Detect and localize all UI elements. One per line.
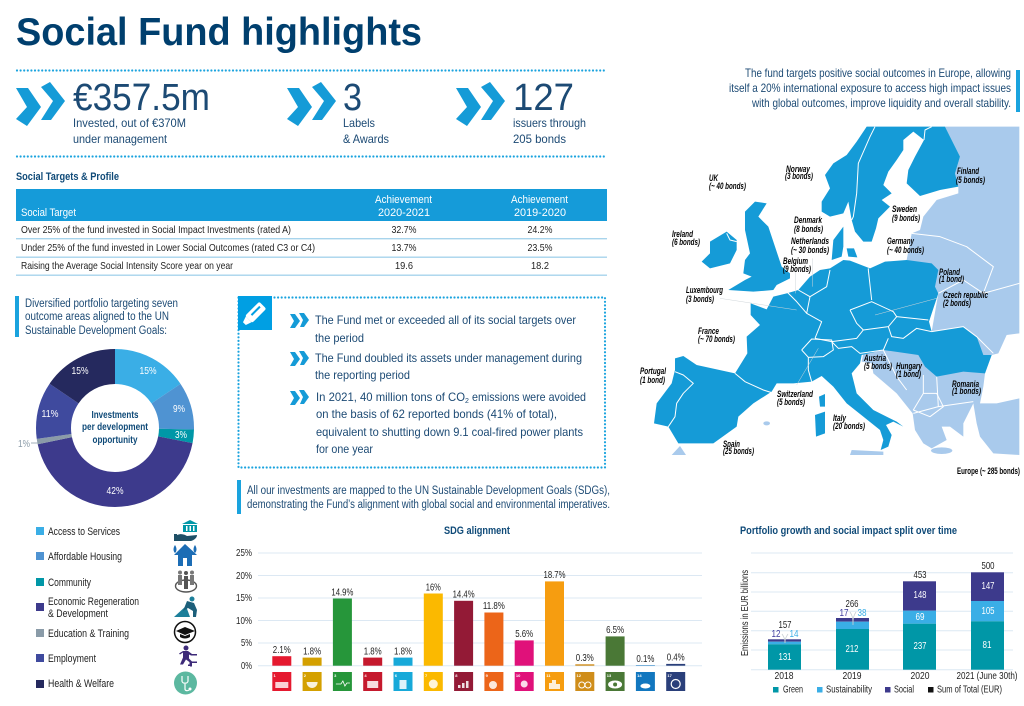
- table rows: 13.7%: [392, 242, 416, 254]
- legend: outcome areas: Education & Training: [48, 628, 129, 640]
- donut chart: [18, 365, 187, 497]
- bar: 2021: 105: [982, 605, 995, 617]
- map labels: (25 bonds): [723, 446, 754, 456]
- invested land: [654, 127, 992, 450]
- map labels: Finland: [957, 166, 979, 176]
- key figure: issuers: [456, 77, 586, 146]
- bullet 2: the reporting period: [315, 368, 410, 382]
- bar: 2020: 69: [916, 611, 925, 623]
- chart legend: [773, 684, 1002, 696]
- icon: highlighter: [238, 296, 272, 330]
- bar values: 1.8%: [364, 646, 382, 658]
- bar values: 18.7%: [544, 569, 566, 581]
- legend: outcome areas: Affordable Housing: [48, 551, 122, 563]
- bar chart: SDG alignment: 20%: [236, 570, 252, 582]
- icon: access to services: [174, 520, 198, 541]
- bar: 2018: [768, 619, 801, 670]
- donut chart: 1%: [18, 438, 30, 450]
- x axis labels: 2018: [774, 670, 794, 682]
- donut centre label: Investments: [92, 409, 139, 421]
- key figure: invested: €357.5m: [73, 77, 210, 119]
- map labels: (1 bond): [939, 274, 964, 284]
- bar: 2021: [971, 560, 1004, 670]
- donut chart: 15%: [72, 365, 88, 377]
- bar: 2020: 237: [914, 640, 927, 652]
- key figure: invested: under management: [73, 132, 168, 146]
- bullet 3: on the basis of 62 reported bonds (41% of total),: [316, 407, 557, 421]
- map of Europe: [640, 127, 1020, 476]
- legend: outcome areas: Economic Regeneration: [48, 596, 139, 608]
- SDG goal tiles: 11: [546, 673, 551, 678]
- donut chart: 42%: [106, 485, 124, 497]
- bullet 1: [290, 313, 576, 345]
- bar values: 1.8%: [303, 646, 321, 658]
- map labels: (1 bonds): [952, 386, 981, 396]
- panel: social targets table: [16, 171, 607, 276]
- map labels: Hungary: [896, 361, 923, 371]
- table rows: 19.6: [395, 260, 413, 272]
- bar values: 11.8%: [483, 600, 505, 612]
- bar values: 2.1%: [273, 644, 291, 656]
- map labels: (9 bonds): [892, 213, 920, 223]
- bar: 2021: 81: [982, 639, 992, 651]
- bar values: 14.4%: [453, 588, 475, 600]
- map labels: Norway: [786, 164, 811, 174]
- key figure: invested: [16, 77, 210, 146]
- map labels: Czech republic: [943, 290, 988, 300]
- icon: education: [174, 622, 196, 642]
- SDG goal tiles: 2: [304, 673, 307, 678]
- map labels: (8 bonds): [794, 224, 823, 234]
- map labels: Germany: [887, 236, 915, 246]
- chart legend: Sustainability: [826, 684, 872, 696]
- table rows: Over 25% of the fund invested in Social Impact Investments (rated A): [21, 224, 291, 236]
- legend: outcome areas: Employment: [48, 653, 96, 665]
- table heading: Social Targets & Profile: [16, 171, 119, 183]
- key figure: labels and awards: Labels: [343, 116, 375, 130]
- bar: 2021: 500: [982, 560, 995, 572]
- table header: Achievement: [511, 194, 568, 206]
- map labels: Poland: [939, 267, 960, 277]
- table rows: 24.2%: [528, 224, 552, 236]
- bullet 1: The Fund met or exceeded all of its social targets over: [315, 313, 576, 327]
- bar: 2018: 12: [772, 628, 781, 640]
- map labels: Ireland: [672, 229, 693, 239]
- x axis labels: 2020: [910, 670, 930, 682]
- bar values: 14.9%: [331, 586, 353, 598]
- bullet 3: In 2021, 40 million tons of CO: [316, 390, 465, 404]
- chart title: SDG alignment: [444, 525, 510, 537]
- icon: economic development worker: [174, 596, 197, 617]
- legend: outcome areas: Health & Welfare: [48, 678, 114, 690]
- table header: Achievement: [375, 194, 432, 206]
- map labels: [640, 164, 988, 456]
- map labels: Luxembourg: [686, 285, 723, 295]
- y axis label: Emissions in EUR billions: [740, 570, 751, 656]
- SDG goal tiles: 10: [516, 673, 521, 678]
- map labels: (5 bonds): [864, 361, 892, 371]
- map labels: (5 bonds): [956, 175, 985, 185]
- bar: 2018: 14: [790, 628, 799, 640]
- bar values: 0.4%: [667, 652, 685, 664]
- SDG goal tiles: 7: [425, 673, 428, 678]
- map labels: (5 bonds): [777, 397, 805, 407]
- map labels: (~ 40 bonds): [709, 181, 746, 191]
- donut centre label: opportunity: [92, 434, 138, 446]
- donut centre label: [82, 409, 148, 446]
- map labels: Sweden: [892, 204, 917, 214]
- table rows: Raising the Average Social Intensity Score year on year: [21, 260, 233, 272]
- map labels: (~ 30 bonds): [791, 245, 829, 255]
- map labels: France: [698, 326, 719, 336]
- SDG goal tiles: 17: [667, 673, 673, 678]
- donut chart: 9%: [173, 403, 185, 415]
- map labels: (20 bonds): [833, 421, 865, 431]
- bar: 2019: 17: [840, 607, 849, 619]
- SDG goal tiles: 3: [334, 673, 337, 678]
- country borders: [668, 127, 1019, 427]
- bar: 2019: 212: [846, 643, 859, 655]
- stacked bar chart: portfolio growth: [740, 525, 1018, 696]
- map labels: (~ 40 bonds): [887, 245, 924, 255]
- map labels: (9 bonds): [783, 264, 811, 274]
- text block: diversified portfolio: Sustainable Development Goals:: [25, 325, 167, 337]
- key figure: labels and awards: 3: [343, 77, 362, 119]
- text block: diversified portfolio: [15, 296, 178, 337]
- key figure: invested: Invested, out of €370M: [73, 116, 186, 130]
- icon: health: [174, 672, 197, 694]
- bar: 2019: 38: [858, 607, 867, 619]
- map labels: (1 bond): [640, 375, 665, 385]
- legend: outcome areas: [36, 526, 139, 690]
- map labels: Italy: [833, 413, 847, 423]
- map labels: Portugal: [640, 366, 666, 376]
- bar values: 0.3%: [576, 652, 594, 664]
- bar: 2018: 157: [778, 619, 792, 631]
- bar: 2020: 453: [914, 569, 927, 581]
- map labels: Belgium: [783, 256, 808, 266]
- panel: fund summary callout: [238, 296, 605, 468]
- text block: SDG mapping: [237, 480, 610, 514]
- map labels: (3 bonds): [686, 294, 714, 304]
- bullet 3: [290, 390, 586, 456]
- bar: 2019: [836, 598, 869, 670]
- SDG goal tiles: 1: [274, 673, 276, 678]
- intro text: fund targets: [729, 66, 1020, 112]
- chart legend: Social: [894, 684, 914, 696]
- map labels: Austria: [863, 353, 886, 363]
- key figure: issuers: 205 bonds: [513, 132, 566, 146]
- key figure: issuers: issuers through: [513, 116, 586, 130]
- bar values: 6.5%: [606, 624, 624, 636]
- map labels: Spain: [723, 439, 740, 449]
- text block: SDG mapping: All our investments are mapped to the UN Sustainable Development Goals (SDGs),: [247, 485, 610, 497]
- map labels: (1 bond): [896, 369, 921, 379]
- SDG goal tiles: 8: [455, 673, 458, 678]
- chart legend: Green: [783, 684, 803, 696]
- icon: employment: [179, 646, 197, 666]
- text block: SDG mapping: demonstrating the Fund’s alignment with global social and environmental imperatives.: [247, 499, 610, 511]
- bar: 2019: 266: [846, 598, 859, 610]
- table rows: [16, 224, 607, 276]
- donut centre label: per development: [82, 421, 148, 433]
- bullet 3: equivalent to shutting down 9.1 coal-fired power plants: [316, 425, 583, 439]
- bar chart: SDG alignment: [236, 525, 702, 691]
- bar chart: SDG alignment: 10%: [236, 615, 252, 627]
- key figures band: [16, 70, 607, 156]
- table header: Social Target: [21, 207, 76, 219]
- bar chart: SDG alignment: 15%: [236, 592, 252, 604]
- table rows: 18.2: [531, 260, 549, 272]
- key figure: labels and awards: [287, 77, 389, 146]
- bullet 2: The Fund doubled its assets under management during: [315, 351, 582, 365]
- table header: 2019-2020: [514, 207, 566, 219]
- map labels: (~ 70 bonds): [698, 334, 735, 344]
- SDG goal tiles: 6: [395, 673, 398, 678]
- map labels: Netherlands: [791, 236, 829, 246]
- icon: community: [176, 570, 196, 592]
- donut chart: 15%: [140, 365, 156, 377]
- bullet 1: the period: [315, 331, 364, 345]
- table header: [16, 189, 607, 221]
- SDG goal tiles: 13: [607, 673, 612, 678]
- bar values: 5.6%: [515, 628, 533, 640]
- bullet 3: for one year: [316, 442, 373, 456]
- map labels: Denmark: [794, 215, 823, 225]
- map labels: Switzerland: [777, 389, 813, 399]
- bar chart: SDG alignment: 25%: [236, 547, 252, 559]
- non-invested land: [672, 127, 1019, 455]
- bar chart: SDG alignment: 5%: [241, 637, 252, 649]
- table rows: Under 25% of the fund invested in Lower Social Outcomes (rated C3 or C4): [21, 242, 315, 254]
- table rows: 23.5%: [528, 242, 552, 254]
- bars: [272, 581, 685, 666]
- bar values: 1.8%: [394, 646, 412, 658]
- SDG goal tiles: 9: [486, 673, 489, 678]
- chart title: Portfolio growth and social impact split over time: [740, 525, 957, 537]
- x axis labels: 2019: [842, 670, 862, 682]
- bar: 2020: 148: [914, 589, 927, 601]
- legend: outcome areas: Community: [48, 577, 91, 589]
- SDG goal tiles: 14: [637, 673, 642, 678]
- legend: outcome areas: Access to Services: [48, 526, 120, 538]
- bar values: 0.1%: [636, 653, 654, 665]
- SDG goal tiles: 12: [576, 673, 582, 678]
- bar: 2020: [903, 569, 936, 670]
- map labels: UK: [709, 173, 719, 183]
- table header: 2020-2021: [378, 207, 430, 219]
- table rows: 32.7%: [392, 224, 416, 236]
- map labels: Romania: [952, 379, 979, 389]
- icon: affordable housing: [174, 544, 197, 566]
- map labels: (3 bonds): [785, 171, 813, 181]
- bar chart: SDG alignment: 0%: [241, 660, 252, 672]
- bullet 3: 2: [465, 398, 469, 405]
- donut chart: 3%: [175, 429, 187, 441]
- chart legend: Sum of Total (EUR): [937, 684, 1002, 696]
- text block: diversified portfolio: Diversified portfolio targeting seven: [25, 298, 178, 310]
- donut chart: 11%: [42, 408, 58, 420]
- bar values: 16%: [426, 582, 441, 594]
- bullet 2: [290, 351, 582, 382]
- bar: 2021: 147: [982, 580, 995, 592]
- leader lines: [720, 258, 937, 385]
- bullet 3: emissions were avoided: [472, 390, 586, 404]
- SDG goal tiles: [272, 672, 685, 691]
- key figure: issuers: 127: [513, 77, 574, 119]
- bar values: [273, 569, 685, 665]
- SDG goal tiles: 4: [364, 673, 367, 678]
- legend: outcome areas: & Development: [48, 608, 108, 620]
- x axis labels: [774, 670, 1018, 682]
- text block: diversified portfolio: outcome areas aligned to the UN: [25, 311, 169, 323]
- map labels: (6 bonds): [672, 237, 700, 247]
- key figure: labels and awards: & Awards: [343, 132, 389, 146]
- bar: 2018: 131: [778, 651, 792, 663]
- map labels: (2 bonds): [943, 298, 971, 308]
- title: Social Fund highlights: [16, 11, 422, 54]
